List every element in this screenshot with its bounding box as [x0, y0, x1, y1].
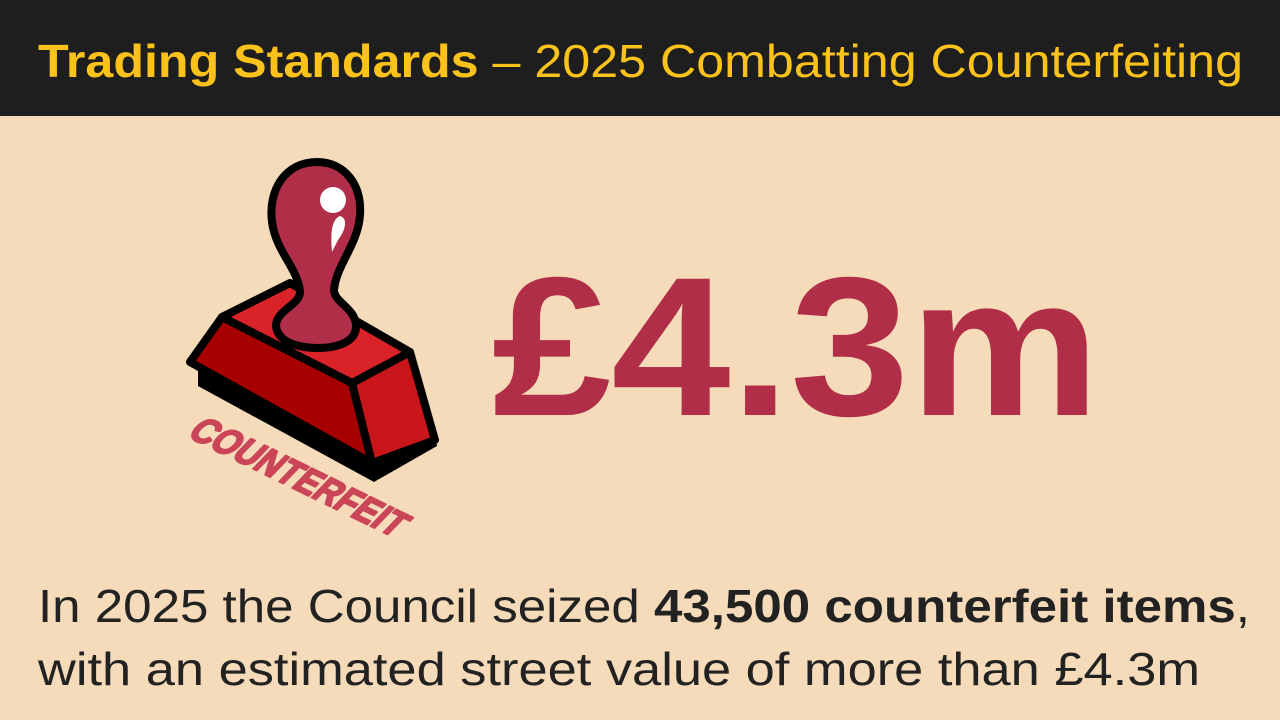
right face — [352, 352, 435, 463]
title: Trading Standards – 2025 Combatting Counterfeiting — [38, 35, 1243, 87]
handle — [271, 162, 360, 348]
top face — [222, 283, 410, 383]
headline value: £4.3m — [492, 236, 1100, 457]
summary text — [37, 580, 1250, 695]
icon: counterfeit stamp — [180, 162, 437, 544]
summary text: with an estimated street value of more than £4.3m — [37, 643, 1200, 695]
front face — [190, 317, 372, 463]
header bar — [0, 0, 1280, 116]
stamp base shadow — [198, 362, 437, 482]
highlight — [320, 187, 346, 213]
stamp text: COUNTERFEIT — [180, 411, 419, 544]
summary text: In 2025 the Council seized 43,500 counterfeit items , — [38, 580, 1250, 632]
